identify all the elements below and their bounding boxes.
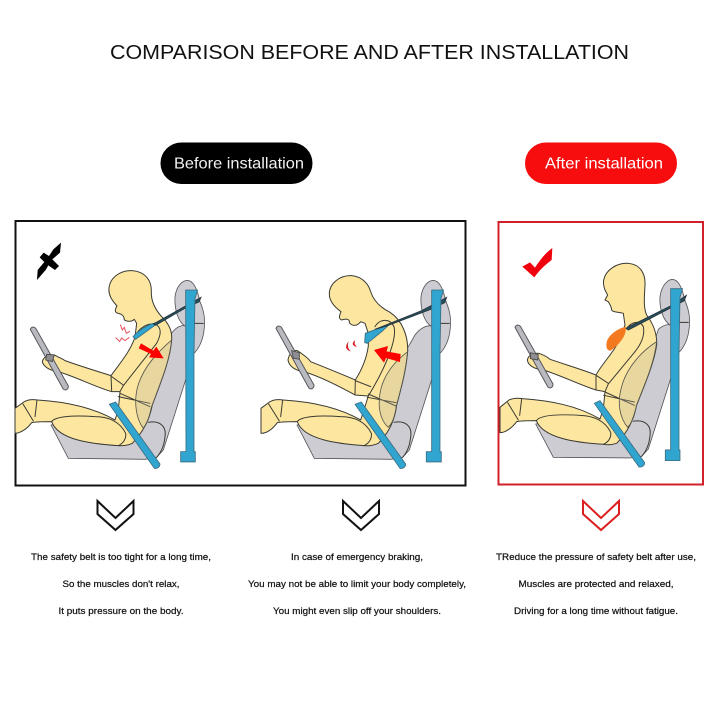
- pill: after installation: After installation: [545, 156, 663, 172]
- pill: after installation: [525, 142, 677, 184]
- steering wheel: [515, 325, 553, 388]
- illustration: tight belt driver: [15, 271, 205, 468]
- illustration: emergency braking driver: [261, 276, 451, 468]
- text block: after installation: [496, 552, 696, 617]
- text block: before, tight belt: [31, 552, 211, 617]
- seat belt: [355, 290, 447, 468]
- seat: [297, 280, 451, 459]
- seat: [51, 280, 205, 459]
- text block: before, emergency braking: You might even slip off your shoulders.: [273, 606, 441, 617]
- text block: before, tight belt: It puts pressure on the body.: [58, 606, 184, 617]
- seat: [536, 279, 690, 458]
- seat belt: [594, 289, 686, 467]
- icon: pain marks: [116, 325, 130, 341]
- icon: red impact arrow: [374, 346, 401, 363]
- pill: before installation: Before installation: [174, 156, 304, 172]
- icon: black cross: [37, 243, 61, 280]
- lumbar overlay: [136, 340, 172, 428]
- icon: black chevron 2: [343, 501, 379, 530]
- panel: before installation frame: [16, 221, 466, 486]
- text block: after installation: TReduce the pressure of safety belt after use,: [496, 552, 696, 563]
- seat belt: [109, 290, 201, 468]
- pill: before installation: [160, 142, 312, 184]
- icon: red check mark: [522, 248, 552, 277]
- icon: red chevron: [583, 501, 619, 530]
- lumbar overlay: [379, 352, 408, 427]
- text block: after installation: Driving for a long time without fatigue.: [514, 606, 678, 617]
- panel: after installation frame: [498, 222, 703, 484]
- driver body: [261, 276, 408, 446]
- steering wheel: [276, 326, 314, 389]
- lumbar overlay: [619, 342, 657, 427]
- orange shoulder pad: [606, 327, 626, 351]
- text block: after installation: Muscles are protected and relaxed,: [518, 579, 674, 590]
- steering wheel: [30, 327, 68, 390]
- icon: black chevron 1: [98, 501, 134, 530]
- text block: before, tight belt: So the muscles don't relax,: [62, 579, 180, 590]
- title: COMPARISON BEFORE AND AFTER INSTALLATION: [110, 42, 629, 64]
- text block: before, emergency braking: [248, 552, 466, 617]
- icon: red pressure arrow: [139, 343, 164, 358]
- text block: before, emergency braking: In case of emergency braking,: [291, 552, 423, 563]
- driver body: [500, 263, 657, 445]
- text block: before, tight belt: The safety belt is too tight for a long time,: [31, 552, 211, 563]
- driver body: [15, 271, 172, 446]
- icon: shock marks: [346, 340, 357, 351]
- illustration: driver with shoulder pad: [500, 263, 690, 467]
- text block: before, emergency braking: You may not be able to limit your body completely,: [248, 579, 466, 590]
